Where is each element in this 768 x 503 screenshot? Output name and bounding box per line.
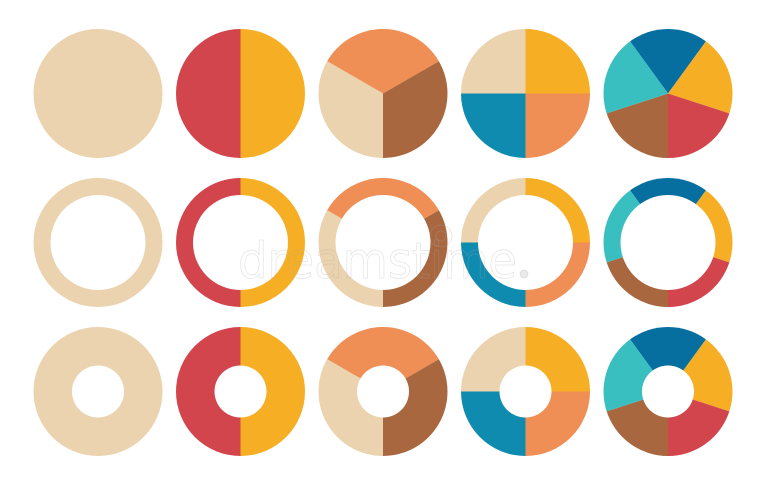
- ring: five segments: [604, 178, 732, 307]
- donut: four segments: [461, 327, 590, 456]
- pie: five segments: [604, 29, 732, 158]
- donut: two segments: [176, 327, 305, 456]
- row: solid pies: [34, 29, 732, 158]
- ring: four segments: [461, 178, 590, 307]
- row: thin rings: [34, 178, 732, 307]
- ring: one segment: [34, 178, 162, 307]
- ring: three segments: [318, 178, 448, 307]
- pie: three segments: [318, 29, 448, 158]
- pie: four segments: [461, 29, 590, 158]
- row: thick donuts: [34, 327, 732, 456]
- donut: one segment: [34, 327, 162, 456]
- donut: five segments: [604, 327, 732, 456]
- pie: two segments: [176, 29, 305, 158]
- watermark: dreamstime: [238, 232, 517, 290]
- donut: three segments: [318, 327, 448, 456]
- ring: two segments: [176, 178, 305, 307]
- pie: one segment: [34, 29, 162, 158]
